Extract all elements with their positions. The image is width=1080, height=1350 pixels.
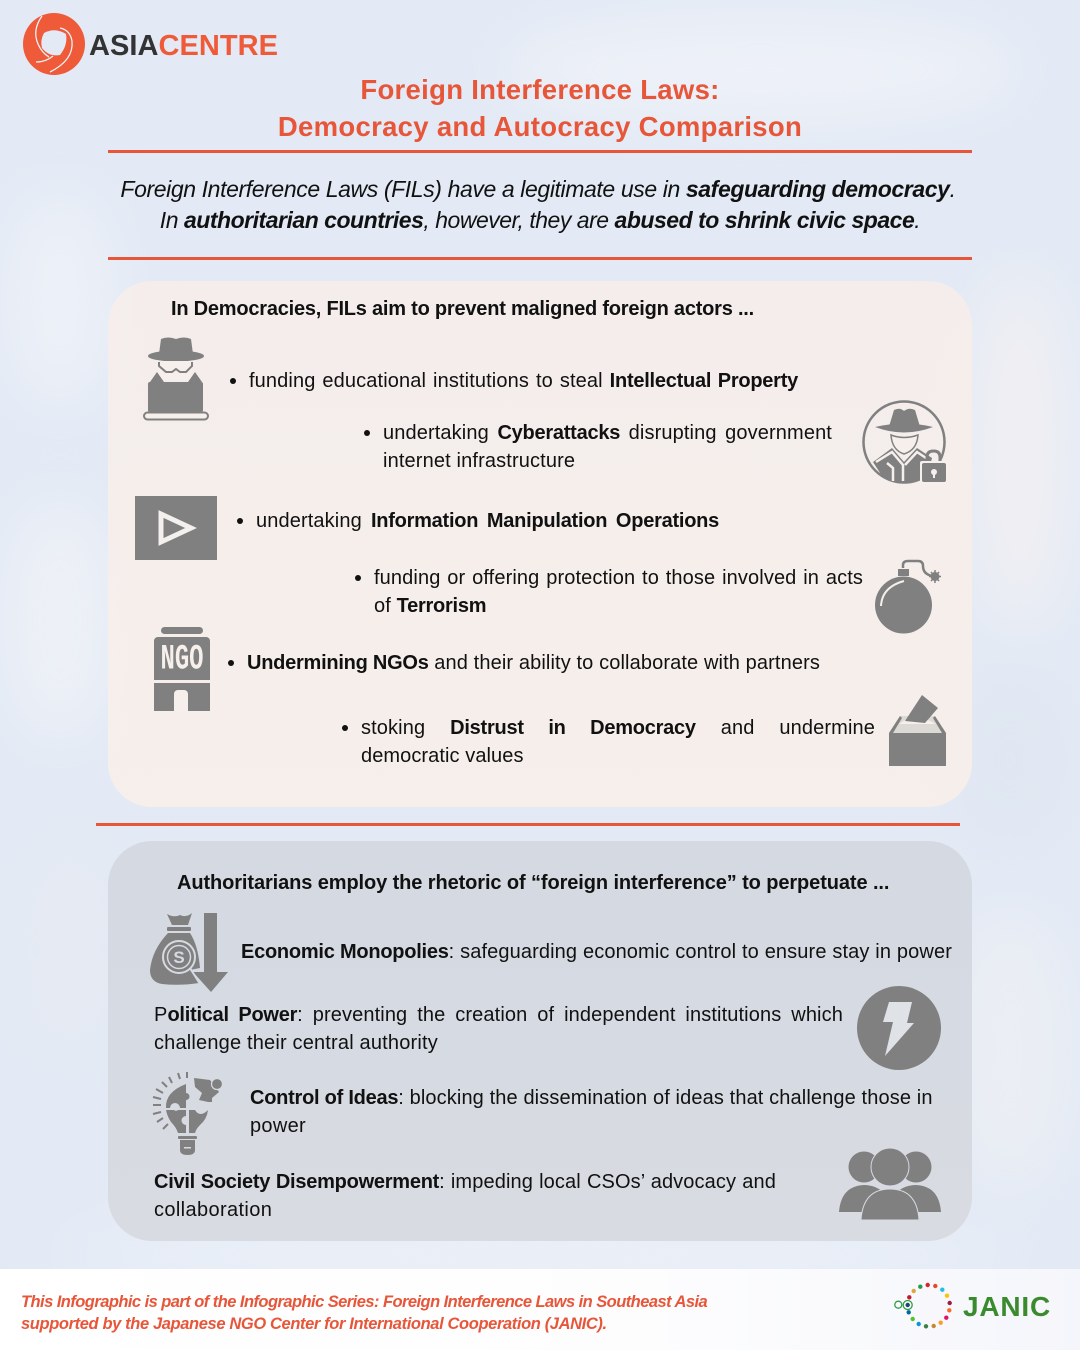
bullet: intellectual property: funding educational institutions to steal Intellectual Property <box>249 370 798 392</box>
icon: swirl mark <box>23 13 85 75</box>
intro text: Foreign Interference Laws (FILs) have a legitimate use in safeguarding democracy. <box>120 176 956 202</box>
footer text: This Infographic is part of the Infographic Series: Foreign Interference Laws in Southeast Asia <box>21 1293 707 1311</box>
icon: ballot box <box>889 695 946 766</box>
logo: JANIC <box>894 1282 1051 1328</box>
text: civil society disempowerment: Civil Society Disempowerment: impeding local CSOs’ advocacy and <box>154 1171 776 1193</box>
icon: NGO building <box>154 627 210 711</box>
intro text <box>120 176 956 233</box>
bullet: terrorism: of Terrorism <box>374 595 486 617</box>
text: political power: Political Power: preventing the creation of independent institutions which <box>154 1004 843 1026</box>
footer band <box>0 1269 1080 1350</box>
heading: authoritarians: Authoritarians employ the rhetoric of “foreign interference” to perpetuate ... <box>177 872 889 894</box>
icon: coloured dot ring <box>894 1282 952 1328</box>
icon: group of people <box>839 1148 941 1220</box>
text: political power <box>154 1004 843 1054</box>
title <box>278 74 802 142</box>
icon: NGO building: NGO <box>160 639 204 679</box>
icon: spy at laptop <box>143 338 209 420</box>
bullet: cyberattacks <box>364 422 832 472</box>
heading: democracies: In Democracies, FILs aim to prevent maligned foreign actors ... <box>171 298 754 320</box>
text: civil society disempowerment <box>154 1171 776 1221</box>
icon: video play <box>135 496 217 560</box>
logo wordmark: ASIACENTRE <box>89 30 278 62</box>
bullet: terrorism: funding or offering protection to those involved in acts <box>374 567 863 589</box>
bullet: cyberattacks: internet infrastructure <box>383 450 575 472</box>
text: civil society disempowerment: collaboration <box>154 1199 272 1221</box>
JANIC wordmark: JANIC <box>963 1291 1051 1322</box>
icon: bomb <box>875 560 941 634</box>
bullet: distrust in democracy: stoking Distrust in Democracy and undermine <box>361 717 875 739</box>
intro text: In authoritarian countries, however, they are abused to shrink civic space. <box>160 207 920 233</box>
text: control of ideas: Control of Ideas: blocking the dissemination of ideas that challenge those in <box>250 1087 933 1109</box>
logo: Asia Centre <box>23 13 278 75</box>
bullet: undermining NGOs: Undermining NGOs and their ability to collaborate with partners <box>247 652 820 674</box>
title: Democracy and Autocracy Comparison <box>278 111 802 142</box>
footer text <box>21 1293 708 1333</box>
icon: money bag with down arrow <box>150 913 228 992</box>
bullet: distrust in democracy <box>342 717 875 767</box>
text: economic monopolies: Economic Monopolies: safeguarding economic control to ensure stay in power <box>241 941 952 963</box>
footer text: supported by the Japanese NGO Center for International Cooperation (JANIC). <box>21 1315 607 1333</box>
bullet: cyberattacks: undertaking Cyberattacks disrupting government <box>383 422 832 444</box>
text: political power: challenge their central authority <box>154 1032 438 1054</box>
title: Foreign Interference Laws: <box>360 74 720 105</box>
icon: lightning bolt in circle <box>857 986 941 1070</box>
panel: authoritarians <box>108 841 972 1241</box>
text: control of ideas <box>250 1087 933 1137</box>
text: control of ideas: power <box>250 1115 306 1137</box>
bullet: information manipulation: undertaking Information Manipulation Operations <box>256 510 719 532</box>
bullet: distrust in democracy: democratic values <box>361 745 524 767</box>
bullet: terrorism <box>355 567 863 617</box>
icon: hacker with padlock <box>862 400 946 484</box>
icon: money bag with down arrow: S <box>173 948 185 967</box>
icon: puzzle light bulb <box>152 1072 222 1155</box>
panel: democracies <box>108 281 972 807</box>
